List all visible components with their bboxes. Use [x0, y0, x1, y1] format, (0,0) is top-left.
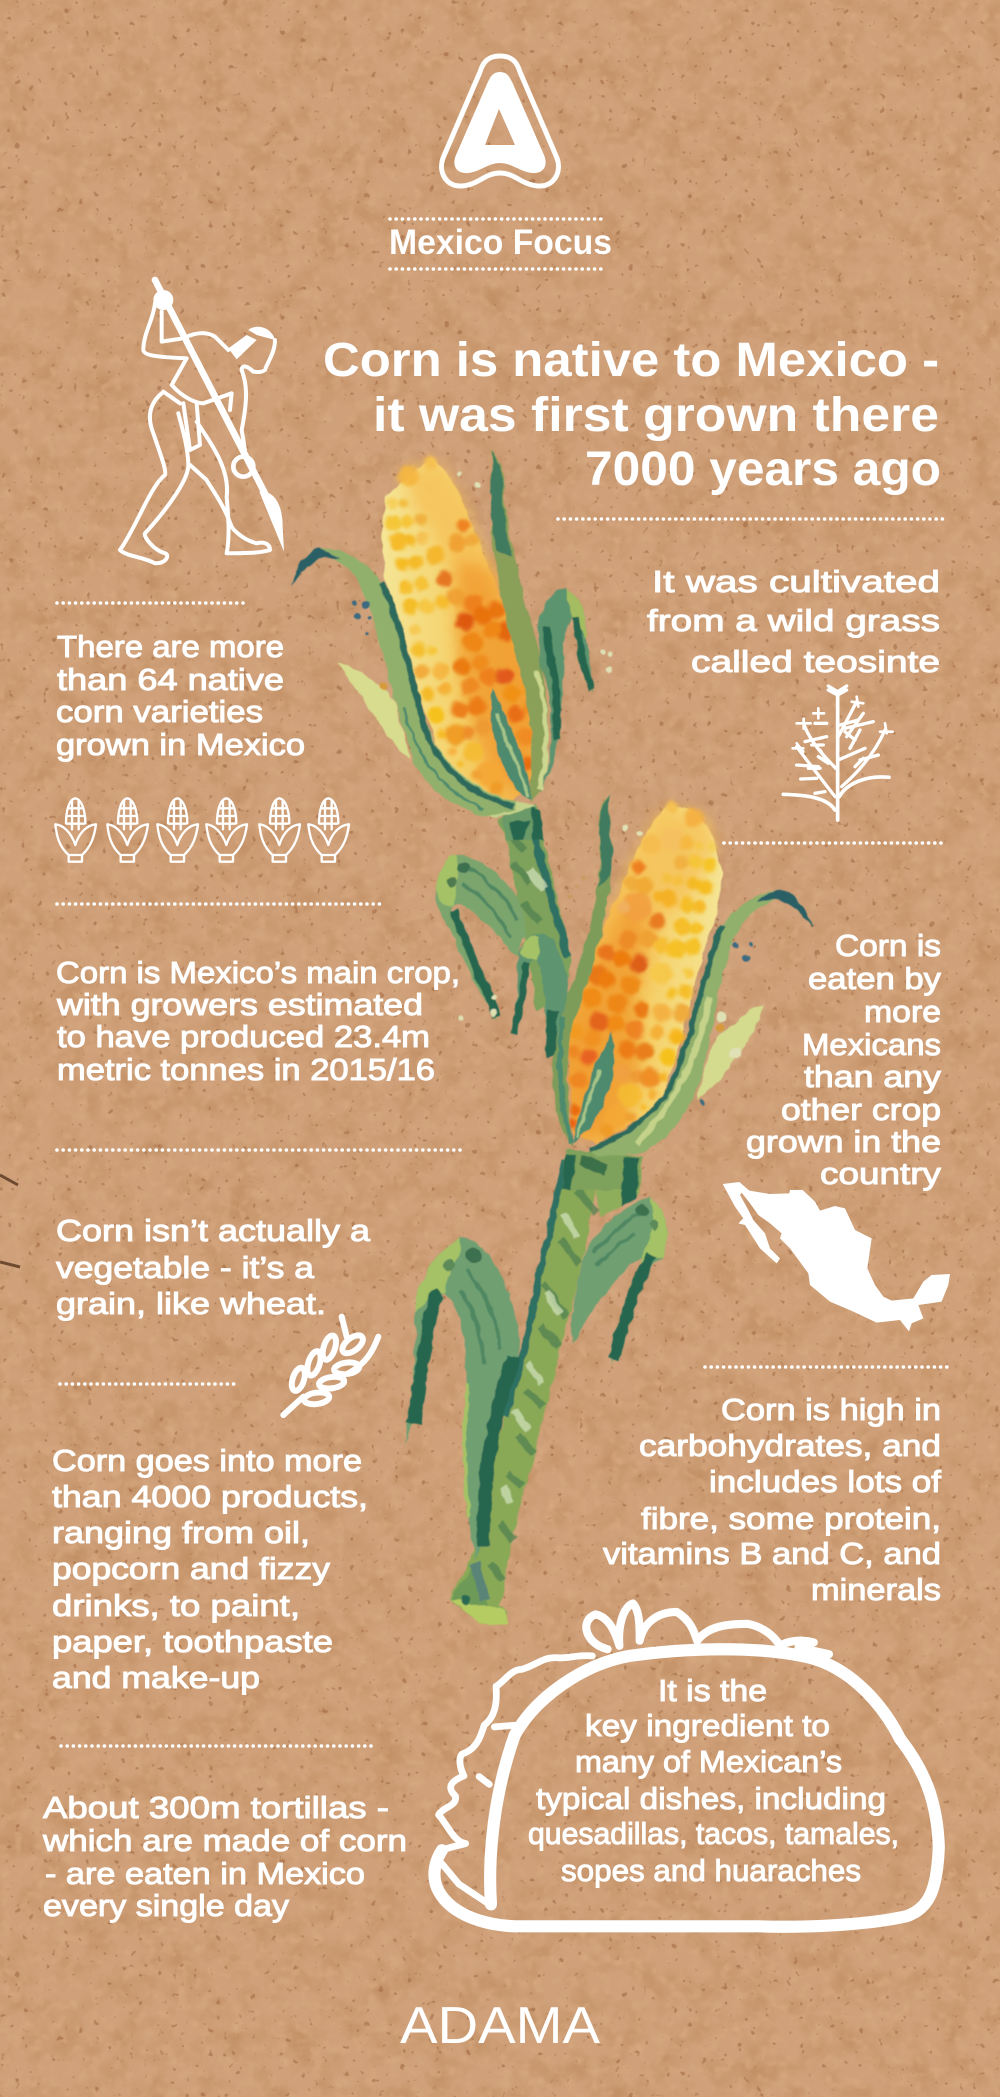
- upper ear of corn: [290, 450, 613, 840]
- divider and callout: eaten by more Mexicans: [724, 843, 947, 1191]
- divider and callout: nutrition: Corn is high in: [721, 1392, 941, 1427]
- divider and callout: 300m tortillas: every single day: [43, 1888, 290, 1923]
- divider and callout: eaten by more Mexicans: country: [820, 1156, 942, 1191]
- lower ear of corn: [458, 793, 813, 1157]
- lower right leaf: [571, 1197, 668, 1367]
- upper stalk and middle leaves: [435, 807, 643, 1190]
- divider and callout: eaten by more Mexicans: more: [864, 994, 941, 1029]
- divider and callout: main crop: Corn is Mexico’s main crop,: [56, 955, 460, 990]
- title: [323, 334, 941, 496]
- taco text: quesadillas, tacos, tamales,: [528, 1816, 899, 1851]
- divider and callout: 300m tortillas: which are made of corn: [42, 1823, 407, 1858]
- lower stalk: [448, 1150, 643, 1625]
- divider and callout: 4000 products: and make-up: [52, 1660, 260, 1695]
- icon: map of Mexico: [723, 1182, 950, 1331]
- divider and callout: eaten by more Mexicans: other crop: [781, 1092, 941, 1127]
- divider and callout: nutrition: minerals: [811, 1572, 941, 1607]
- title: Corn is native to Mexico -: [323, 334, 939, 387]
- icon: farmer with spade: [120, 280, 284, 563]
- icon: taco outline with text: [434, 1604, 939, 1927]
- divider and callout: main crop: with growers estimated: [56, 987, 423, 1022]
- divider and callout: 4000 products: ranging from oil,: [52, 1515, 310, 1550]
- icon: teosinte grass: [783, 686, 893, 820]
- divider and callout: cultivated from teosinte: from a wild grass: [647, 603, 940, 638]
- divider and callout: grain not vegetable: Corn isn’t actually a: [56, 1213, 371, 1248]
- divider and callout: eaten by more Mexicans: Mexicans: [802, 1027, 941, 1062]
- divider and callout: 4000 products: paper, toothpaste: [52, 1624, 333, 1659]
- divider and callout: 300m tortillas: About 300m tortillas -: [43, 1790, 389, 1825]
- title: it was first grown there: [373, 389, 939, 442]
- divider and callout: main crop: [56, 904, 460, 1087]
- divider and callout: grain not vegetable: [56, 1150, 465, 1321]
- divider and callout: nutrition: includes lots of: [709, 1464, 941, 1499]
- icon: wheat ear: [283, 1317, 378, 1415]
- taco text: It is the: [658, 1673, 767, 1708]
- footer logotype: ADAMA: ADAMA: [400, 1997, 600, 2055]
- divider and callout: nutrition: carbohydrates, and: [639, 1428, 941, 1463]
- lower left leaf: [405, 1238, 519, 1560]
- divider and callout: eaten by more Mexicans: Corn is: [835, 928, 941, 963]
- divider and callout: grain not vegetable: vegetable - it’s a: [56, 1250, 315, 1285]
- divider and callout: eaten by more Mexicans: than any: [804, 1059, 942, 1094]
- divider and callout: eaten by more Mexicans: eaten by: [808, 961, 942, 996]
- taco text: [528, 1673, 899, 1888]
- divider and callout: 4000 products: popcorn and fizzy: [52, 1551, 331, 1586]
- divider and callout: grain not vegetable: grain, like wheat.: [56, 1286, 326, 1321]
- divider and callout: 4000 products: than 4000 products,: [52, 1479, 368, 1514]
- divider and callout: cultivated from teosinte: It was cultivated: [652, 564, 940, 599]
- icons: six corn cobs: [55, 798, 349, 862]
- taco text: typical dishes, including: [536, 1781, 886, 1816]
- divider and callout: 300m tortillas: [42, 1746, 407, 1923]
- divider and callout: cultivated from teosinte: [558, 519, 944, 679]
- divider and callout: 4000 products: drinks, to paint,: [52, 1588, 300, 1623]
- taco text: many of Mexican’s: [575, 1744, 842, 1779]
- title: 7000 years ago: [585, 443, 941, 496]
- divider and callout: nutrition: fibre, some protein,: [641, 1501, 941, 1536]
- illustration: watercolour corn plant: [290, 450, 813, 1625]
- divider and callout: 64 native varieties: There are more: [57, 629, 284, 664]
- heading: Mexico Focus: Mexico Focus: [389, 223, 612, 262]
- taco text: sopes and huaraches: [561, 1853, 861, 1888]
- divider and callout: 4000 products: [52, 1384, 368, 1695]
- divider and callout: 64 native varieties: [56, 603, 305, 762]
- logo: ADAMA triangle mark: [442, 56, 558, 186]
- divider and callout: nutrition: vitamins B and C, and: [603, 1536, 941, 1571]
- divider and callout: 4000 products: Corn goes into more: [52, 1443, 362, 1478]
- divider and callout: cultivated from teosinte: called teosinte: [691, 644, 940, 679]
- divider and callout: main crop: metric tonnes in 2015/16: [57, 1052, 435, 1087]
- divider and callout: eaten by more Mexicans: grown in the: [746, 1124, 941, 1159]
- divider and callout: 64 native varieties: than 64 native: [57, 662, 284, 697]
- divider and callout: 300m tortillas: - are eaten in Mexico: [45, 1856, 365, 1891]
- divider and callout: nutrition: [603, 1367, 950, 1607]
- divider and callout: main crop: to have produced 23.4m: [57, 1019, 430, 1054]
- taco text: key ingredient to: [585, 1708, 830, 1743]
- taco shell: [434, 1604, 939, 1927]
- divider and callout: 64 native varieties: grown in Mexico: [56, 727, 305, 762]
- divider and callout: 64 native varieties: corn varieties: [56, 694, 263, 729]
